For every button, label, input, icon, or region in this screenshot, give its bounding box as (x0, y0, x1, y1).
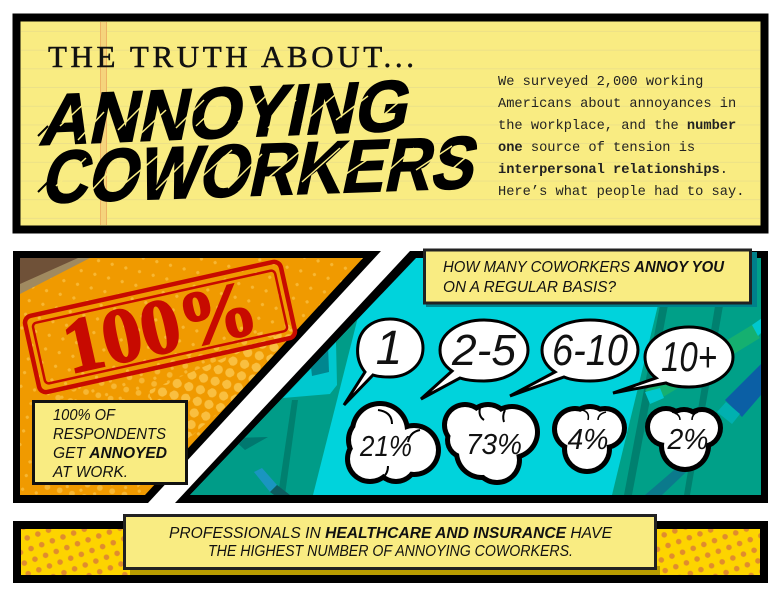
title: annoying coworkers: ANNOYING (35, 66, 419, 161)
callout: question: ON A REGULAR BASIS? (443, 279, 616, 296)
speech bubble: 10+: 10+ (661, 333, 717, 380)
title: annoying coworkers: COWORKERS (37, 120, 486, 219)
callout: highest number: PROFESSIONALS IN HEALTHCARE AND INSURANCE HAVE (169, 525, 612, 542)
callout: question (424, 250, 757, 307)
desk corner (20, 258, 90, 294)
speech bubble: 6-10 (510, 320, 638, 396)
callout: 100% of respondents: 100% OF (53, 407, 116, 424)
panel: header notepad (16, 18, 764, 230)
cloud: 4% (552, 404, 627, 474)
callout: 100% of respondents: RESPONDENTS (53, 426, 166, 443)
speech bubble: 1 (344, 319, 423, 405)
heading: the truth about: THE TRUTH ABOUT... (48, 39, 414, 74)
speech bubble: 10+ (613, 327, 733, 393)
panel: 100 percent annoyed (13, 251, 381, 503)
stamp: 100% (23, 256, 297, 397)
text block: survey intro: We surveyed 2,000 working (498, 75, 703, 90)
cloud: 21% (345, 401, 441, 484)
speech bubble: 2-5: 2-5 (451, 326, 517, 375)
callout: question: HOW MANY COWORKERS ANNOY YOU (443, 259, 724, 276)
text block: survey intro: the workplace, and the number (498, 119, 736, 134)
panel: healthcare footer (17, 516, 764, 579)
cloud: 73% (442, 402, 540, 485)
panel: how many coworkers (175, 250, 768, 503)
callout: 100% of respondents: AT WORK. (52, 464, 128, 481)
cloud: 2% (645, 406, 723, 472)
text block: survey intro (498, 75, 744, 200)
speech bubble: 1: 1 (376, 322, 402, 375)
cloud: 2%: 2% (667, 424, 708, 456)
cloud: 4%: 4% (568, 424, 608, 456)
text block: survey intro: interpersonal relationships. (498, 163, 728, 178)
callout: highest number (124, 516, 656, 568)
text block: survey intro: Americans about annoyances in (498, 97, 736, 112)
callout: 100% of respondents (34, 402, 186, 484)
speech bubble: 2-5 (421, 320, 528, 399)
text block: survey intro: Here’s what people had to say. (498, 185, 744, 200)
callout: highest number: THE HIGHEST NUMBER OF ANNOYING COWORKERS. (208, 543, 573, 560)
text block: survey intro: one source of tension is (498, 141, 695, 156)
cloud: 73%: 73% (466, 429, 522, 461)
callout: 100% of respondents: GET ANNOYED (53, 445, 167, 462)
desk photo: right teal area (612, 258, 762, 495)
desk photo: left teal area (190, 317, 358, 495)
speech bubble: 6-10: 6-10 (552, 326, 628, 375)
cloud: 21%: 21% (359, 431, 412, 463)
stamp: 100%: 100% (55, 263, 265, 390)
title: annoying coworkers (35, 66, 486, 219)
